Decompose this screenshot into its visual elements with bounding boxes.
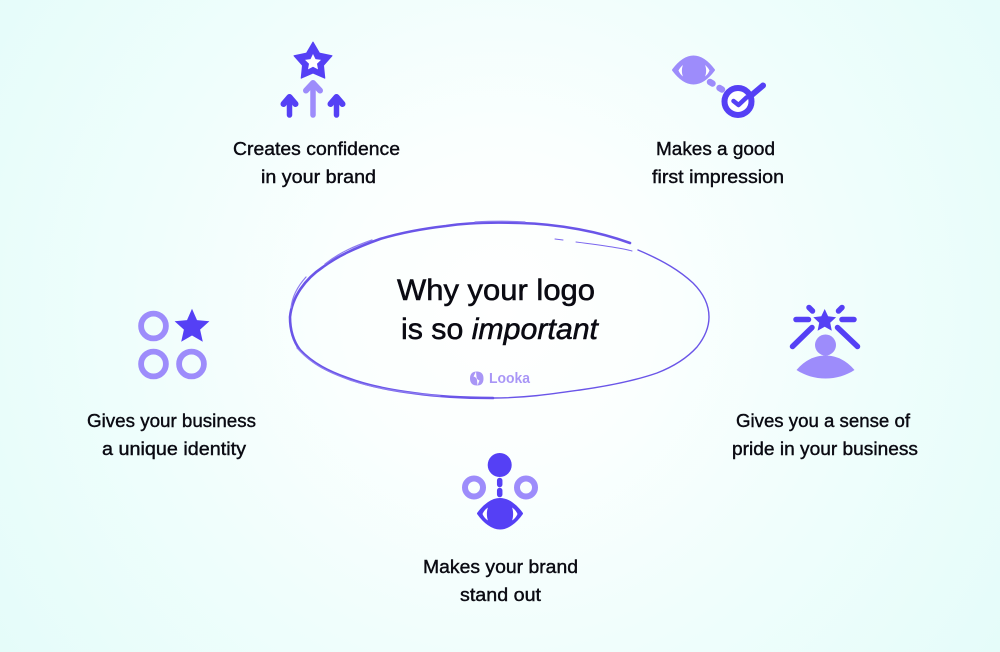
label: stand out: stand out — [460, 584, 541, 605]
icon: circles and star — [141, 309, 209, 376]
label: unique identity: a unique identity — [102, 438, 247, 459]
title: is so important — [401, 313, 600, 346]
label: first impression: first impression — [652, 166, 784, 187]
icon: eye with circles — [465, 453, 535, 528]
label: stand out: Makes your brand — [423, 556, 578, 577]
oval brush stroke — [290, 221, 709, 398]
label: sense of pride: Gives you a sense of — [736, 410, 911, 431]
title — [397, 274, 600, 346]
Looka logo: Looka — [489, 371, 531, 387]
icon: person with star — [792, 308, 858, 378]
label: first impression — [652, 138, 784, 187]
label: unique identity: Gives your business — [87, 410, 256, 431]
label: creates confidence: in your brand — [261, 166, 376, 187]
label: stand out — [423, 556, 578, 605]
icon: eye with check — [673, 56, 763, 115]
label: sense of pride: pride in your business — [732, 438, 918, 459]
icon: star with arrows — [284, 42, 342, 115]
title: Why your logo — [397, 274, 595, 307]
Looka logo — [470, 371, 531, 387]
label: creates confidence: Creates confidence — [233, 138, 400, 159]
label: first impression: Makes a good — [656, 138, 775, 159]
label: unique identity — [87, 410, 256, 459]
label: sense of pride — [732, 410, 918, 459]
label: creates confidence — [233, 138, 400, 187]
